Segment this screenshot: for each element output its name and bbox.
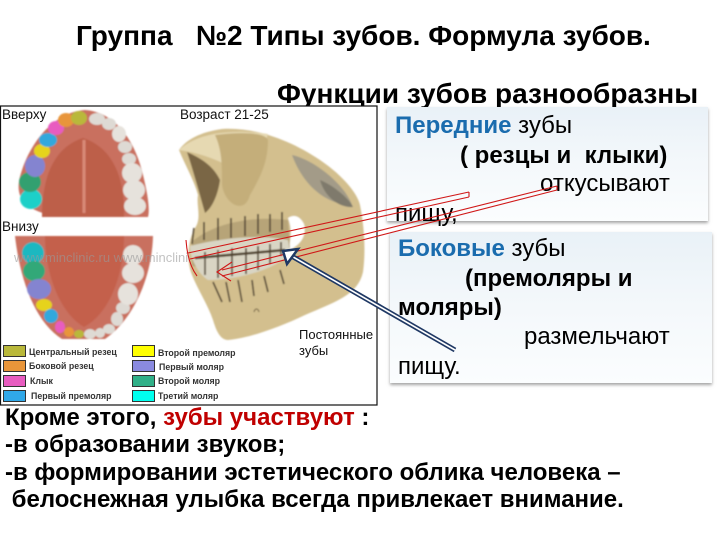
legend: Первый премоляр (31, 391, 112, 401)
upper jaw (19, 110, 149, 217)
heading: age: Возраст 21-25 (180, 107, 269, 122)
arrow: red front arrow 1 (186, 192, 469, 276)
skull (179, 129, 364, 340)
panel: front teeth (387, 107, 708, 221)
side teeth text (398, 235, 670, 380)
side teeth text: (премоляры и (465, 265, 633, 292)
lower jaw (15, 236, 153, 339)
front teeth text: откусывают (540, 170, 670, 197)
front teeth text: пищу, (395, 200, 458, 227)
side teeth text: моляры) (398, 294, 502, 321)
front teeth text (395, 112, 670, 227)
panel: tooth anatomy image (0, 105, 378, 406)
legend: Боковой резец (29, 361, 94, 371)
title: Группа №2 Типы зубов. Формула зубов. (76, 20, 651, 51)
heading: upper jaw: Вверху (2, 107, 47, 122)
label: permanent teeth (299, 327, 373, 358)
label: permanent teeth: Постоянные (299, 327, 373, 342)
legend: Третий моляр (158, 391, 219, 401)
legend (4, 346, 236, 402)
label: permanent teeth: зубы (299, 343, 328, 358)
side teeth text: размельчают (524, 323, 670, 350)
bottom text block: Кроме этого, зубы участвуют : -в образовании звуков; -в формировании эстетического облика человека – белоснежная улыбка всегда привлекает внимание. (5, 404, 624, 513)
arrow: red front arrow 2 (217, 186, 557, 281)
front teeth text: ( резцы и клыки) (460, 142, 667, 169)
side teeth text: пищу. (398, 353, 461, 380)
legend: Центральный резец (29, 347, 117, 357)
legend: Первый моляр (159, 362, 225, 372)
legend: Клык (30, 376, 53, 386)
subtitle: Функции зубов разнообразны (277, 78, 698, 109)
legend: Второй моляр (158, 376, 221, 386)
panel: side teeth (390, 232, 712, 383)
legend: Второй премоляр (158, 348, 236, 358)
side teeth text: Боковые зубы (398, 235, 566, 262)
arrow: blue side arrow (283, 249, 455, 350)
front teeth text: Передние зубы (395, 112, 572, 139)
watermark: www.minclinic.ru www.minclinic.ru www.minclinic.ru (13, 250, 309, 265)
heading: lower jaw: Внизу (2, 219, 39, 234)
